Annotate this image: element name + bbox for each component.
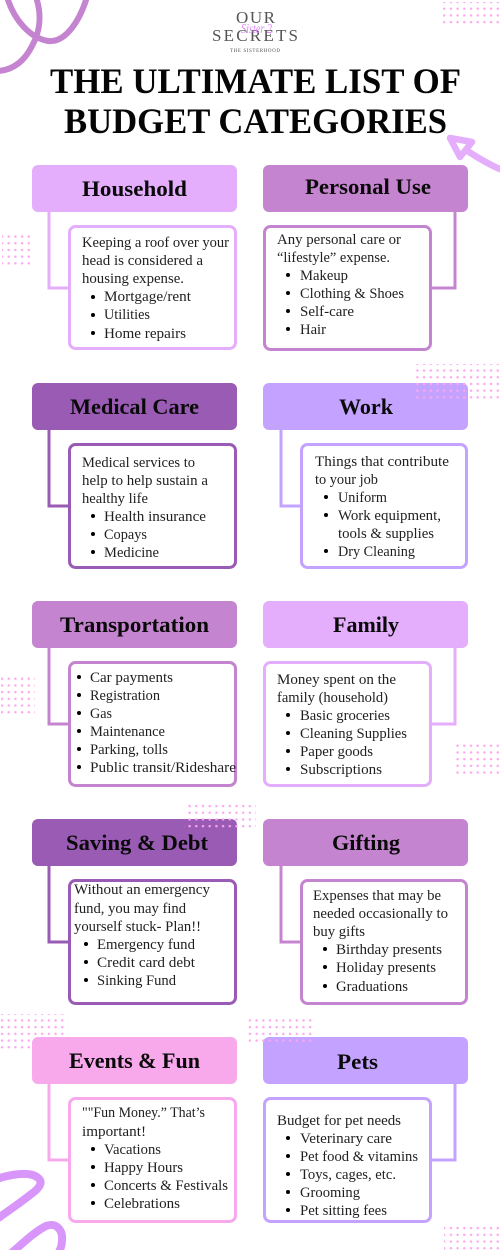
text box: saving and debt <box>70 880 236 1004</box>
panel: events and fun <box>32 1037 237 1222</box>
title <box>50 61 461 141</box>
text box: family <box>264 662 430 786</box>
decoration: bottom-left squiggles <box>0 1174 62 1250</box>
text box: household: Mortgage/rent <box>104 289 192 305</box>
panel: gifting <box>263 819 468 1004</box>
text box: work: to your job <box>315 472 378 488</box>
text box: events and fun: ""Fun Money.” That’s <box>82 1105 205 1121</box>
text box: medical care: Medical services to <box>82 455 195 471</box>
text box: household: Home repairs <box>104 326 186 342</box>
text box: pets: Grooming <box>300 1185 360 1201</box>
panel: work <box>263 383 468 568</box>
connector: personal use <box>430 212 455 288</box>
text box: personal use: Hair <box>300 322 326 338</box>
decoration: arrow <box>450 138 500 170</box>
header: medical care: Medical Care <box>70 394 199 419</box>
text box: household: Keeping a roof over your <box>82 235 229 251</box>
text box: family: family (household) <box>277 690 388 706</box>
header: pets <box>263 1037 468 1084</box>
header: saving and debt: Saving & Debt <box>66 830 209 855</box>
title: BUDGET CATEGORIES <box>64 101 447 141</box>
text box: personal use: Clothing & Shoes <box>300 286 404 302</box>
connector: saving and debt <box>49 866 70 942</box>
text box: work: Uniform <box>338 490 387 506</box>
connector: events and fun <box>49 1084 70 1160</box>
text box: medical care: healthy life <box>82 491 148 507</box>
panel: pets <box>263 1037 468 1222</box>
text box: medical care: Medicine <box>104 545 159 561</box>
text box: transportation: Car payments <box>90 670 173 686</box>
text box: transportation: Parking, tolls <box>90 742 168 758</box>
text box: pets: Pet sitting fees <box>300 1203 387 1219</box>
connector: medical care <box>49 430 70 506</box>
header: saving and debt <box>32 819 237 866</box>
text box: gifting: Expenses that may be <box>313 888 441 904</box>
text box: household: housing expense. <box>82 271 184 287</box>
panel: saving and debt <box>32 819 237 1004</box>
text box: events and fun: Celebrations <box>104 1196 180 1212</box>
header: household <box>32 165 237 212</box>
text box: personal use: “lifestyle” expense. <box>277 250 390 266</box>
text box: medical care <box>70 444 236 568</box>
text box: pets: Veterinary care <box>300 1131 392 1147</box>
text box: pets <box>264 1098 430 1222</box>
text box: family: Subscriptions <box>300 762 382 778</box>
text box: work: Dry Cleaning <box>338 544 415 560</box>
text box: work: Things that contribute <box>315 454 449 470</box>
logo <box>212 8 298 54</box>
text box: saving and debt: Sinking Fund <box>97 973 176 989</box>
header: events and fun <box>32 1037 237 1084</box>
text box: household: head is considered a <box>82 253 203 269</box>
text box: household <box>70 226 236 348</box>
text box: family: Paper goods <box>300 744 373 760</box>
text box: transportation: Gas <box>90 706 112 722</box>
header: personal use: Personal Use <box>305 174 431 199</box>
text box: medical care: help to help sustain a <box>82 473 208 489</box>
header: transportation <box>32 601 237 648</box>
text box: personal use <box>264 226 430 350</box>
logo: THE SISTERHOOD <box>230 49 280 54</box>
header: work <box>263 383 468 430</box>
logo: SECRETS <box>212 26 298 45</box>
connector: family <box>430 648 455 724</box>
header: family: Family <box>333 612 399 637</box>
text box: saving and debt: Emergency fund <box>97 937 195 953</box>
text box: transportation <box>70 662 236 786</box>
text box: work <box>302 444 466 568</box>
text box: events and fun <box>70 1098 236 1222</box>
text box: events and fun: Vacations <box>104 1142 161 1158</box>
text box: household: Utilities <box>104 307 150 323</box>
panel: personal use <box>263 165 468 350</box>
header: gifting <box>263 819 468 866</box>
text box: pets: Budget for pet needs <box>277 1113 401 1129</box>
text box: work: Work equipment, <box>338 508 441 524</box>
text box: personal use: Self-care <box>300 304 354 320</box>
text box: personal use: Makeup <box>300 268 348 284</box>
text box: events and fun: important! <box>82 1124 146 1140</box>
text box: transportation: Public transit/Rideshare <box>90 760 236 776</box>
text box: gifting: buy gifts <box>313 924 365 940</box>
text box: gifting: Graduations <box>336 979 408 995</box>
text box: saving and debt: fund, you may find <box>74 901 186 917</box>
connector: pets <box>430 1084 455 1160</box>
text box: work: tools & supplies <box>338 526 434 542</box>
text box: personal use: Any personal care or <box>277 232 401 248</box>
text box: saving and debt: yourself stuck- Plan!! <box>74 919 201 935</box>
decoration: top-left loops <box>0 0 87 71</box>
connector: household <box>49 212 70 288</box>
text box: transportation: Maintenance <box>90 724 165 740</box>
header: work: Work <box>339 394 394 419</box>
text box: saving and debt: Credit card debt <box>97 955 196 971</box>
connector: work <box>281 430 302 506</box>
text box: medical care: Health insurance <box>104 509 206 525</box>
text box: family: Money spent on the <box>277 672 396 688</box>
header: personal use <box>263 165 468 212</box>
text box: saving and debt: Without an emergency <box>74 882 210 898</box>
logo: Sister 2 <box>241 22 272 37</box>
panel: household <box>32 165 237 348</box>
text box: pets: Toys, cages, etc. <box>300 1167 396 1183</box>
text box: gifting: Holiday presents <box>336 960 436 976</box>
panel: medical care <box>32 383 237 568</box>
title: THE ULTIMATE LIST OF <box>50 61 461 101</box>
header: transportation: Transportation <box>60 612 209 637</box>
logo: OUR <box>236 8 276 27</box>
text box: pets: Pet food & vitamins <box>300 1149 418 1165</box>
text box: transportation: Registration <box>90 688 160 704</box>
header: household: Household <box>82 176 187 201</box>
header: family <box>263 601 468 648</box>
text box: medical care: Copays <box>104 527 147 543</box>
text box: events and fun: Concerts & Festivals <box>104 1178 228 1194</box>
header: gifting: Gifting <box>332 830 400 855</box>
connector: gifting <box>281 866 302 942</box>
text box: gifting: needed occasionally to <box>313 906 448 922</box>
text box: gifting: Birthday presents <box>336 942 442 958</box>
panel: family <box>263 601 468 786</box>
decoration: dots top right <box>443 2 500 26</box>
header: medical care <box>32 383 237 430</box>
connector: transportation <box>49 648 70 724</box>
header: pets: Pets <box>337 1049 378 1074</box>
panel: transportation <box>32 601 237 786</box>
text box: gifting <box>302 880 466 1004</box>
header: events and fun: Events & Fun <box>69 1048 200 1073</box>
text box: family: Cleaning Supplies <box>300 726 407 742</box>
text box: family: Basic groceries <box>300 708 390 724</box>
text box: events and fun: Happy Hours <box>104 1160 183 1176</box>
